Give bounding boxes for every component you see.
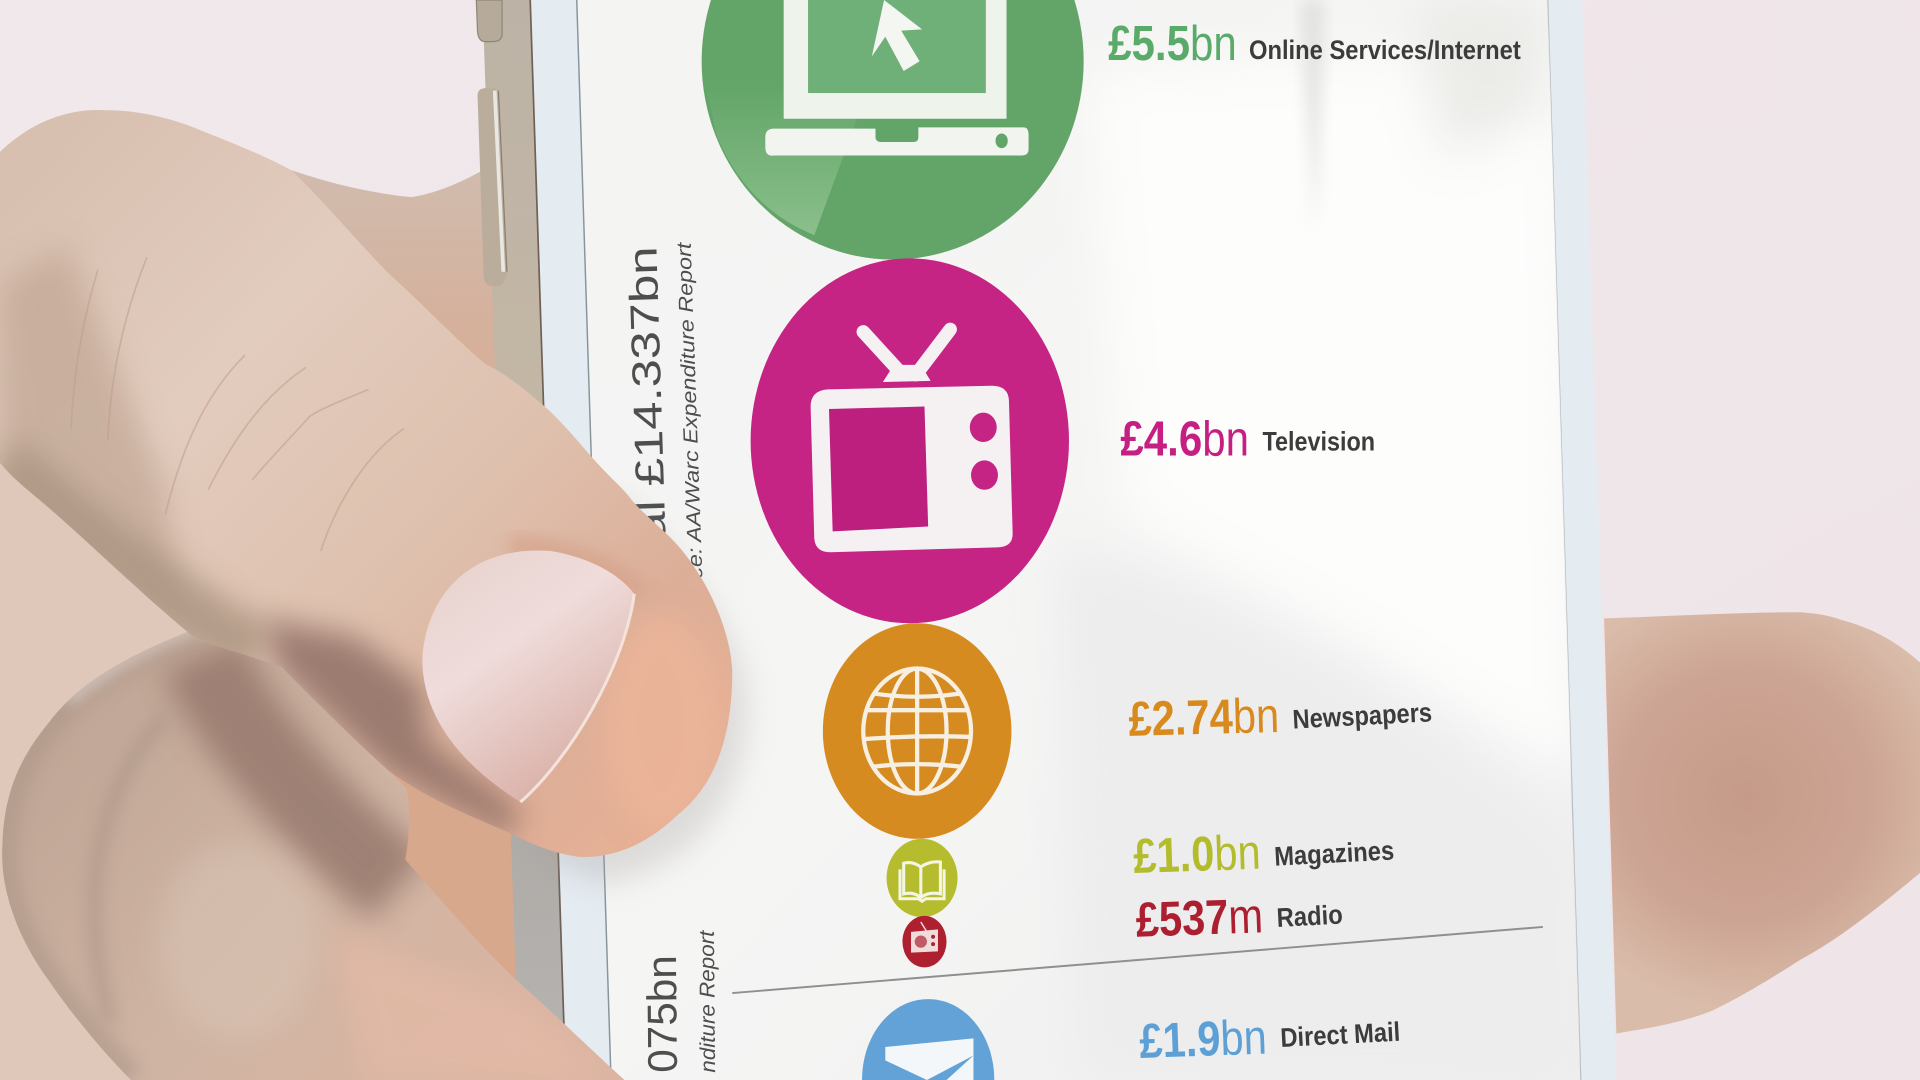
value: online services: £5.5bn — [1108, 17, 1237, 71]
thumb — [0, 110, 732, 857]
dark fold shading — [202, 655, 398, 888]
label: Magazines — [1273, 835, 1395, 872]
icon: tv — [811, 329, 1013, 552]
reflection on circle — [707, 86, 869, 235]
label: Direct Mail — [1280, 1017, 1401, 1053]
value: direct mail: £1.9bn — [1138, 1011, 1268, 1069]
value: newspapers: £2.74bn — [1128, 689, 1280, 747]
metal side edge — [482, 0, 566, 1080]
label: Newspapers — [1292, 697, 1433, 735]
finger tip warmth — [346, 949, 488, 1062]
label: Radio — [1276, 900, 1343, 933]
lower finger — [2, 627, 624, 1080]
icon: envelope — [885, 1038, 973, 1080]
icon: radio — [911, 922, 938, 953]
right finger — [1604, 612, 1920, 1033]
pink around nail — [509, 545, 639, 595]
screen — [577, 0, 1581, 1080]
circle: radio — [902, 916, 947, 967]
vertical total: upper section: Total £14.337bn — [619, 246, 677, 608]
value: television — [1120, 413, 1375, 467]
pale rim light — [67, 627, 196, 700]
lower edge band — [0, 463, 257, 655]
knuckle creases — [71, 257, 404, 551]
value: online services — [1108, 17, 1521, 71]
value: newspapers — [1128, 689, 1433, 747]
thumbnail — [422, 550, 634, 802]
icon: globe — [857, 669, 977, 793]
dark area beside nail — [263, 618, 520, 838]
palm behind phone, upper — [233, 149, 541, 514]
value: magazines — [1132, 826, 1395, 884]
palm behind phone, lower — [367, 735, 519, 992]
white bezel — [530, 0, 1616, 1080]
vertical source: lower section: nditure Report — [695, 929, 720, 1073]
thumb shadow on screen — [539, 490, 747, 884]
vertical source: upper section: Source: AA/Warc Expenditure Report — [674, 241, 709, 629]
value: direct mail — [1138, 1011, 1401, 1069]
tip warmth — [612, 621, 700, 821]
label: Online Services/Internet — [1249, 35, 1521, 65]
inner crease — [94, 716, 165, 1022]
icon: laptop with cursor — [765, 0, 1029, 156]
value: radio: £537m — [1135, 889, 1264, 948]
icon: open book — [900, 862, 944, 901]
blurred skin behind left hand — [0, 453, 245, 1080]
side buttons — [476, 0, 507, 287]
phone body — [476, 0, 1616, 1080]
vertical total: lower section: 075bn — [638, 955, 686, 1073]
left striated shading — [0, 249, 181, 570]
circle: online services — [702, 0, 1084, 260]
circle: direct mail — [862, 999, 994, 1080]
value: television: £4.6bn — [1120, 413, 1249, 467]
value: radio — [1135, 889, 1343, 948]
value: magazines: £1.0bn — [1132, 826, 1262, 884]
label: Television — [1262, 427, 1375, 457]
circle: magazines — [887, 839, 958, 917]
circle: newspapers — [823, 623, 1011, 839]
light pad — [169, 855, 304, 1026]
screen reflections — [1130, 0, 1580, 1080]
circle: television — [751, 258, 1069, 623]
divider line — [732, 927, 1543, 993]
outer rim — [2, 629, 193, 1080]
